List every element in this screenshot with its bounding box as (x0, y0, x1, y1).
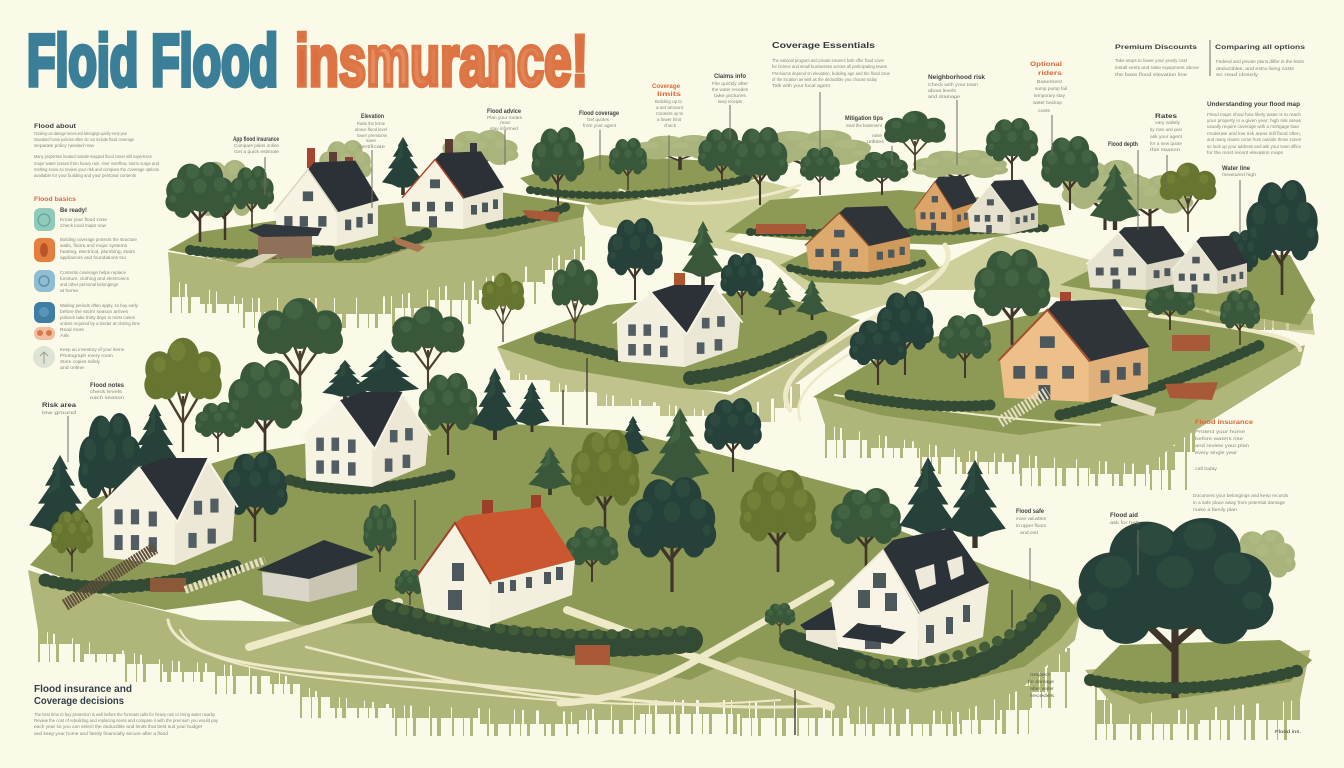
label: orange callout: temporary stay (1034, 93, 1066, 98)
panel: flood about: Flood about (34, 124, 76, 130)
icon: shield (34, 238, 55, 262)
label: app flood insurance (233, 137, 280, 154)
label: coverage limits: Building up to (655, 99, 682, 104)
label: left small: each season (90, 395, 125, 400)
panel: claims and payments (1215, 45, 1306, 77)
label: neighbourhood risk (928, 75, 986, 99)
panel: claims and payments: Federal and private plans differ in the limits (1216, 59, 1305, 64)
panel: policy options: Premium Discounts (1115, 45, 1198, 51)
panel: coverage basics (772, 40, 890, 88)
label: app flood insurance: Compare plans online (234, 143, 279, 148)
label: lower notes: Flood aid (1110, 513, 1138, 519)
island: far right (1060, 255, 1315, 325)
icon: rain (34, 270, 55, 292)
panel: flood about: Separate policy needed now (34, 143, 95, 148)
trees: middle row (482, 218, 1260, 385)
label: lower notes: move valuables (1016, 516, 1047, 521)
label: mitigation: utilities (867, 139, 885, 144)
panel: flood about: Standard home policies often do not include flood coverage (34, 137, 134, 142)
panel: flood basics: Keep an inventory of your items (60, 347, 125, 352)
house 5 (1086, 226, 1248, 294)
label: orange callout: costs (1038, 108, 1051, 113)
label: app flood insurance: App flood insurance (233, 137, 280, 143)
panel: flood about (34, 124, 160, 178)
label: claims: the water recedes (712, 87, 749, 92)
water: right island (815, 345, 1305, 465)
label: neighbourhood risk: and drainage (928, 94, 961, 99)
panel: flood insurance right: call today (1195, 466, 1218, 471)
panel: flood insurance coverage: The best time to buy protection is well before the forecast calls for heavy rain or rising water nearby (34, 712, 216, 717)
panel: flood basics: policies take thirty days in most cases (60, 315, 136, 320)
title (27, 22, 588, 102)
label: flood coverage (579, 111, 620, 128)
panel: flood about: melting snow so review your risk and compare the coverage options (34, 167, 160, 172)
panel: flood basics: Ask (60, 333, 70, 338)
panel: flood insurance right: make a family plan (1193, 507, 1237, 512)
label: coverage limits: limits (657, 92, 682, 98)
label: mitigation (845, 116, 885, 144)
label: orange callout (1030, 62, 1067, 113)
panel: flood insurance right: Flood insurance (1195, 420, 1254, 426)
panel: flood basics: appliances and foundations too (60, 255, 126, 260)
panel: flood basics: before the storm season arrives (60, 309, 129, 314)
house 8 (301, 392, 431, 487)
label: small right notes (1108, 114, 1256, 177)
label: house two: certificate (359, 144, 386, 149)
flood water reflections (28, 180, 1315, 715)
ground: lower meadow (30, 420, 1081, 693)
label: flood advice: stay informed (490, 126, 518, 131)
panel: flood insurance coverage: each year so you can select the deductible and limits that best suit your budget (34, 724, 203, 729)
label: lower notes: to upper floors (1016, 523, 1047, 528)
label: flood coverage: Flood coverage (579, 111, 620, 117)
roads (168, 185, 1300, 707)
panel: flood about: Many properties located outside mapped flood zones still experience (34, 154, 152, 159)
label: house two: above flood level (355, 127, 387, 132)
panel: flood basics: heating, electrical, plumbing, stairs (60, 249, 136, 254)
icon: waves (34, 302, 55, 323)
title: insmurance! (295, 22, 588, 102)
panel: flood insurance right: in a safe place away from potential damage (1193, 500, 1285, 505)
label: small right notes: vary widely (1155, 120, 1181, 125)
panel: flood about: available for your building and your personal contents (34, 173, 137, 178)
water: top-right channel (585, 180, 1315, 335)
panel: policy options: install vents and raise equipment above (1115, 65, 1199, 70)
house 2 (402, 139, 504, 229)
island: top-right (725, 190, 1065, 245)
label: house two: Raise the home (357, 121, 385, 126)
panel: policy options: the base flood elevation line (1115, 72, 1188, 77)
panel: understanding: Understanding your flood map (1207, 102, 1300, 108)
panel: flood insurance right: and review your plan (1195, 443, 1250, 448)
label: flood advice: now (500, 120, 511, 125)
label: coverage limits: a lower limit (657, 117, 682, 122)
panel: flood insurance right: every single year (1195, 450, 1238, 455)
label: small right notes: Flood depth (1108, 142, 1138, 148)
trees: lower row (29, 298, 1273, 698)
label: lower notes: after water (1030, 686, 1055, 691)
island: top-middle (520, 155, 790, 205)
panel: policy options (1115, 45, 1199, 77)
shed (257, 540, 374, 602)
label: app flood insurance: Get a quick estimate (234, 149, 279, 154)
house 9 (98, 458, 238, 565)
label: mitigation: raise (872, 133, 882, 138)
label: flood coverage: from your agent (583, 123, 617, 128)
panel: flood basics: Know your flood zone (60, 217, 107, 222)
panel: claims and payments: Comparing all options (1215, 45, 1306, 51)
house 1 (274, 148, 379, 246)
panel: understanding (1207, 102, 1302, 155)
panel: policy options: Take steps to lower your yearly cost (1115, 58, 1188, 63)
island: bottom-right (1085, 640, 1312, 704)
label: coverage limits: Contents up to (656, 111, 683, 116)
house 4 (805, 206, 911, 272)
label: left small: check levels (90, 389, 123, 394)
label: left small (42, 383, 125, 415)
panel: flood insurance right: Document your belongings and keep records (1193, 493, 1289, 498)
label: small right notes: for a new quote (1150, 141, 1182, 146)
label: small right notes: ask your agent (1150, 134, 1183, 139)
label: lower notes: and exit (1020, 530, 1039, 535)
panel: flood insurance right: Protect your home (1195, 429, 1246, 434)
water: centre island (497, 325, 860, 412)
panel: flood insurance coverage: Coverage decisions (34, 696, 124, 707)
background foliage (191, 130, 1296, 598)
panel: flood insurance right: before waters rise (1195, 436, 1244, 441)
panel: flood basics: and online (60, 365, 85, 370)
label: orange callout: Optional (1030, 62, 1062, 68)
label: orange callout: riders (1038, 71, 1063, 77)
house 6 (613, 273, 743, 367)
small boats and decks (150, 210, 1218, 665)
panel: flood insurance coverage: Review the cost of rebuilding and replacing items and compare it with the premium you would pay (34, 718, 219, 723)
panel: flood insurance coverage: Flood insurance and (34, 684, 132, 695)
panel: flood insurance right (1193, 420, 1289, 512)
label: house two: save (366, 138, 376, 143)
panel: coverage basics: for homes and small businesses across all participating towns (772, 64, 888, 69)
panel: flood basics (33, 197, 140, 370)
water: far-right streaks (1150, 316, 1315, 322)
leader lines (68, 40, 1240, 735)
island: right (813, 310, 1300, 435)
panel: flood basics: Check local maps now (60, 223, 107, 228)
house 10: red roof (417, 495, 575, 628)
walkways (65, 392, 1155, 605)
panel: coverage basics: The national program and private insurers both offer flood cover (772, 58, 884, 63)
label: lower notes: recedes (1030, 693, 1055, 698)
island: centre (497, 290, 860, 392)
label: small right notes: this season (1150, 147, 1181, 152)
panel: flood insurance coverage (34, 684, 219, 736)
label: lower notes (1016, 509, 1301, 734)
panel: understanding: so look up your address and ask your town office (1207, 144, 1301, 149)
title: Floid Flood (27, 22, 278, 102)
label: small right notes: Water line (1222, 166, 1251, 172)
label: claims: Claims info (714, 74, 746, 80)
label: claims: File quickly after (712, 81, 748, 86)
water: top-left island (168, 217, 585, 302)
panel: flood basics: unless required by a lender at closing time (60, 321, 140, 326)
label: small right notes: measured high (1222, 172, 1256, 177)
island: top-left (168, 192, 585, 263)
label: mitigation: Mitigation tips (845, 116, 884, 122)
panel: coverage basics: of the location as well as the deductible you choose today (772, 77, 878, 82)
label: house two: lower premiums (357, 133, 388, 138)
label: neighbourhood risk: about levels (928, 88, 957, 93)
panel: flood basics: Store copies safely (60, 359, 101, 364)
label: coverage limits (652, 84, 684, 128)
label: coverage limits: Coverage (652, 84, 681, 90)
trees: top row (165, 111, 1318, 295)
panel: flood basics: Contents coverage helps replace (60, 270, 126, 275)
label: neighbourhood risk: Neighborhood risk (928, 75, 986, 81)
label: claims: take pictures (714, 93, 747, 98)
panel: flood basics: Flood basics (34, 197, 77, 203)
label: claims (712, 74, 749, 104)
panel: claims and payments: so read closely (1216, 72, 1259, 77)
label: flood advice (487, 109, 523, 131)
ground (30, 155, 1315, 704)
label: claims: keep receipts (718, 99, 743, 104)
panel: flood basics: furniture, clothing and electronics (60, 276, 130, 281)
panel: flood basics: Building coverage protects the structure (60, 237, 137, 242)
panel: understanding: and many claims come from outside those zones (1207, 137, 1302, 142)
hedges (45, 178, 1300, 688)
panel: flood basics: Photograph every room (60, 353, 113, 358)
panel: coverage basics: Talk with your local agent (772, 83, 831, 88)
house 11 (800, 528, 989, 660)
panel: understanding: usually require coverage with a mortgage loan (1207, 124, 1299, 129)
label: lower notes: for damage (1028, 679, 1054, 684)
label: flood advice: Flood advice (487, 109, 522, 115)
panel: understanding: moderate and low risk areas still flood often, (1207, 131, 1301, 136)
panel: flood about: major water losses from heavy rain, river overflow, storm surge and (34, 161, 159, 166)
panel: understanding: Flood maps show how likely water is to reach (1207, 112, 1301, 117)
label: house two (355, 114, 388, 149)
label: flood advice: Plan your routes (487, 115, 523, 120)
panel: flood basics: Read more (60, 327, 84, 332)
houses (65, 139, 1248, 665)
icon: water (34, 208, 55, 231)
label: left small: Flood notes (90, 383, 125, 389)
label: lower notes: ask for help (1110, 520, 1141, 525)
label: left small: low ground (42, 410, 77, 415)
panel: flood basics: and other personal belongings (60, 282, 119, 287)
label: coverage limits: a set amount (656, 105, 684, 110)
panel: understanding: your property in a given year; high risk areas (1207, 118, 1302, 123)
icon: people (34, 327, 55, 340)
label: lower notes: Flood ins. (1275, 729, 1301, 734)
house 1 porch (234, 224, 322, 268)
panel: coverage basics: Premiums depend on elevation, building age and the flood zone (772, 71, 890, 76)
label: left small: Risk area (42, 403, 77, 409)
label: coverage limits: check (664, 123, 677, 128)
panel: understanding: for the most recent elevation maps (1207, 150, 1284, 155)
label: orange callout: Basement (1037, 79, 1063, 84)
panel: claims and payments: deductibles, and extra living costs (1216, 66, 1295, 71)
water: bottom flood (28, 570, 1085, 712)
label: orange callout: water backup (1033, 100, 1062, 105)
panel: flood basics: Be ready! (60, 208, 87, 214)
label: lower notes: Inspect (1030, 672, 1051, 677)
panel: coverage basics: Coverage Essentials (772, 40, 875, 50)
icon: tree (33, 346, 55, 368)
panel: flood insurance coverage: and keep your home and family financially secure after a flood (34, 731, 168, 736)
water: bottom-right island (1085, 650, 1310, 715)
label: house two: Elevation (361, 114, 384, 120)
panel: flood basics: walls, floors and major systems (60, 243, 128, 248)
panel: flood basics: Waiting periods often apply, so buy early (60, 303, 139, 308)
label: mitigation: Seal the basement (846, 123, 883, 128)
label: flood coverage: Get quotes (587, 117, 610, 122)
label: lower notes: Flood safe (1016, 509, 1045, 515)
house 7 (999, 292, 1149, 402)
panel: flood basics: at home (60, 288, 78, 293)
label: small right notes: Rates (1155, 114, 1178, 120)
label: orange callout: sump pump fail (1035, 86, 1067, 91)
label: small right notes: by zone and year (1150, 127, 1182, 132)
panel: flood about: Flooding can damage homes and belongings quickly every year (34, 131, 127, 136)
label: neighbourhood risk: Check with your town (928, 82, 978, 87)
house 3 (914, 176, 1039, 234)
